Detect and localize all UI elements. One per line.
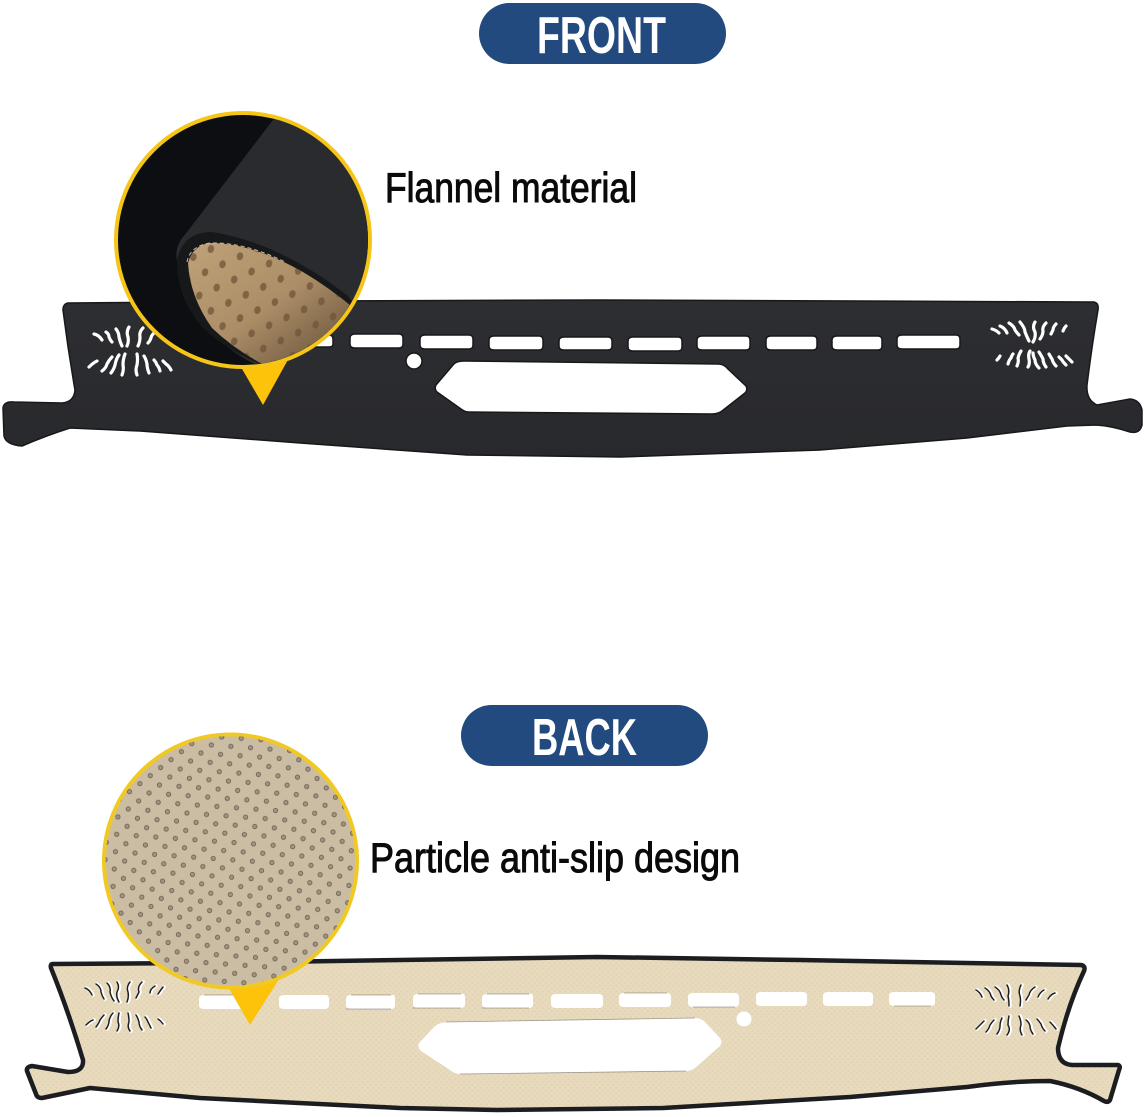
- pill: BACK heading: BACK: [532, 709, 637, 767]
- vents: front left: [89, 327, 171, 375]
- vents: back right: [976, 985, 1057, 1035]
- pill: FRONT heading: FRONT: [537, 7, 666, 65]
- callout: back magnifier lens: [104, 734, 357, 1025]
- vents: front right: [992, 322, 1072, 368]
- flannel roll: [176, 120, 368, 364]
- slot outlines: back: [204, 993, 931, 1074]
- tan backing with particles: [188, 243, 356, 366]
- callout: front magnifier lens: [114, 111, 372, 405]
- pill: FRONT heading: [479, 3, 726, 65]
- back mat dark binding: [27, 957, 1120, 1110]
- vents: back left: [85, 982, 164, 1031]
- pill: BACK heading: [461, 705, 708, 767]
- back dashboard mat: [27, 957, 1120, 1110]
- front dashboard mat: [3, 300, 1142, 457]
- label: Particle anti-slip design: Particle anti-slip design: [370, 834, 740, 881]
- label: Flannel material: Flannel material: [385, 164, 637, 211]
